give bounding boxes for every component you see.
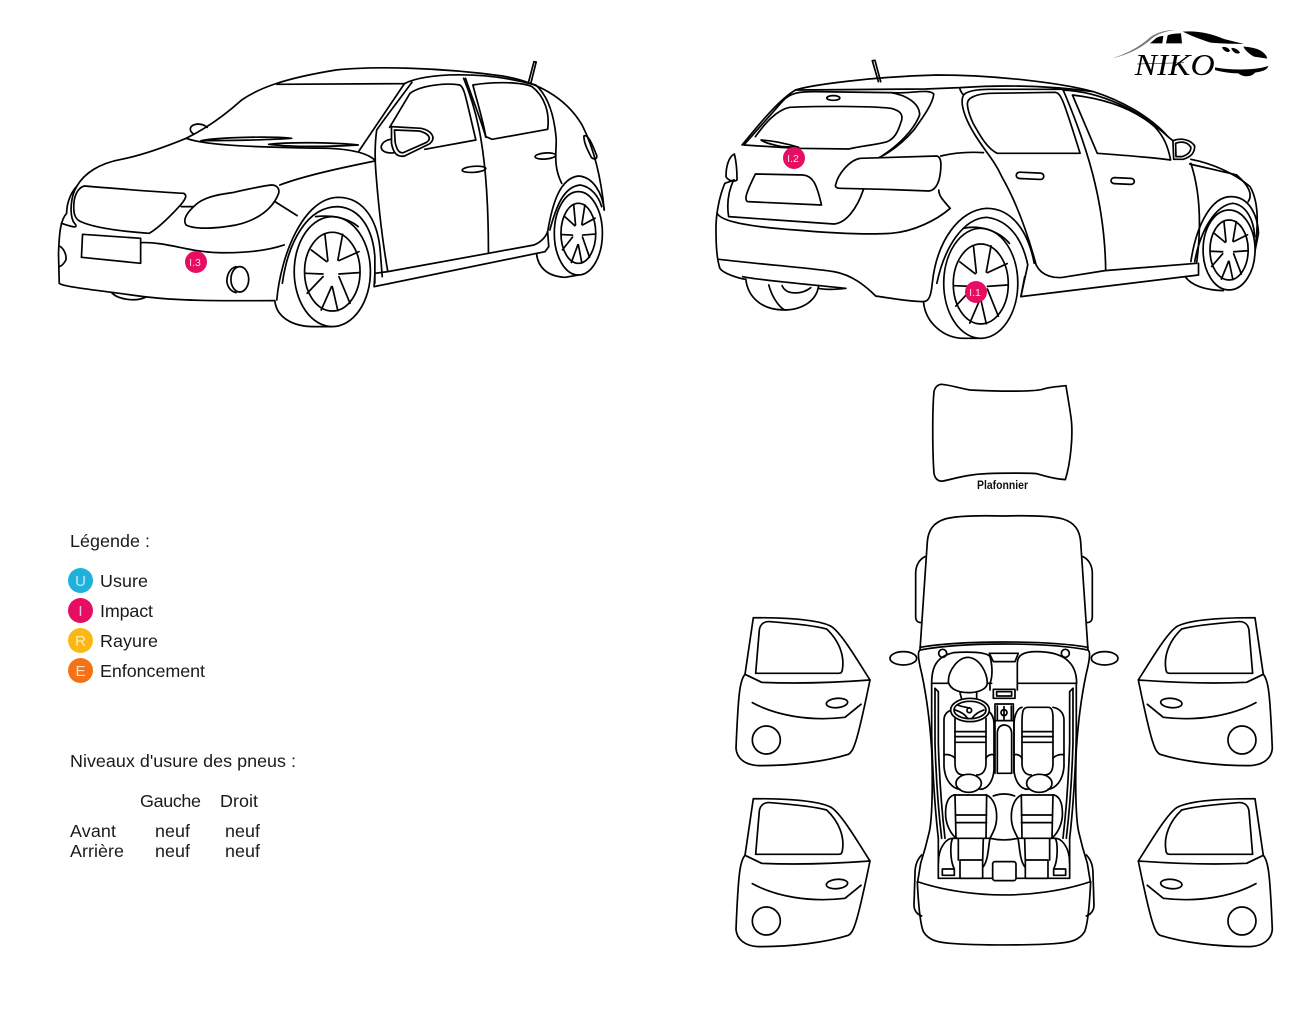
damage marker I.1 — [965, 281, 987, 303]
door handles — [1016, 172, 1044, 180]
grille — [74, 186, 186, 233]
rear light — [584, 136, 597, 159]
legend — [68, 531, 205, 683]
fog light — [231, 267, 249, 292]
roof — [742, 75, 1173, 145]
ceiling panel: plafonnier — [933, 384, 1072, 481]
logo car windows — [1150, 33, 1182, 43]
logo car underside — [1215, 66, 1268, 76]
table header — [140, 791, 258, 811]
door: front left — [736, 618, 870, 766]
doors — [464, 78, 488, 253]
legend item: impact: I — [78, 603, 83, 620]
sill — [1021, 263, 1199, 297]
antenna — [872, 60, 881, 82]
legend item: usure: Usure — [100, 571, 148, 591]
legend item: impact — [68, 598, 153, 623]
legend item: enfoncement: E — [75, 663, 86, 680]
logo: Niko car — [1112, 30, 1268, 82]
row: arriere — [70, 841, 260, 861]
row: arriere: neuf — [225, 841, 260, 861]
rear window — [744, 106, 902, 149]
bumper — [141, 243, 284, 253]
damage marker I.2 — [783, 147, 805, 169]
car: front three-quarter view — [58, 62, 604, 327]
ceiling panel label: Plafonnier — [977, 480, 1028, 492]
left front seat — [944, 710, 994, 792]
logo wordmark: NIKO — [1134, 48, 1215, 82]
left half exterior — [890, 557, 947, 916]
damage marker I.1: I.1 — [969, 287, 981, 299]
front wheel — [1191, 197, 1258, 262]
steering wheel — [951, 698, 989, 722]
driver dome — [948, 657, 987, 693]
logo car headlights — [1222, 47, 1240, 54]
right front seat — [1014, 707, 1064, 792]
tyre wear heading: Niveaux d'usure des pneus : — [70, 751, 296, 771]
door: rear right — [1138, 799, 1272, 947]
logo swoosh — [1112, 30, 1175, 58]
hood top — [920, 516, 1088, 650]
doors — [960, 88, 1197, 278]
logo car roof — [1183, 31, 1244, 44]
left rear seat — [938, 795, 997, 878]
trunk lower — [728, 180, 863, 224]
door handles — [462, 165, 486, 173]
door mirror — [1173, 139, 1195, 159]
far rear wheel — [746, 279, 818, 310]
centre console — [989, 653, 1018, 662]
plate recess — [746, 174, 821, 205]
tyre wear table — [70, 751, 296, 861]
hood — [58, 138, 275, 301]
damage marker I.3 — [185, 251, 207, 273]
logo car grille — [1243, 47, 1267, 59]
right half exterior — [1061, 557, 1118, 916]
rear floor — [938, 794, 1070, 878]
sill — [388, 232, 548, 272]
legend heading: Légende : — [70, 531, 150, 551]
hood and front wing — [1191, 159, 1257, 257]
right lamp — [835, 156, 941, 191]
table header: Gauche — [140, 791, 201, 811]
roof and windshield — [186, 68, 604, 210]
legend item: rayure — [68, 628, 158, 653]
front wheel — [275, 302, 332, 327]
antenna — [528, 62, 536, 83]
far mirror — [190, 124, 207, 134]
dashboard — [932, 652, 992, 690]
bumper — [716, 180, 746, 279]
row: avant: neuf — [155, 821, 190, 841]
row: avant: Avant — [70, 821, 116, 841]
damage marker I.3: I.3 — [189, 257, 201, 269]
legend item: rayure: Rayure — [100, 631, 158, 651]
logo strike line — [1137, 63, 1184, 64]
legend item: enfoncement — [68, 658, 205, 683]
legend item: enfoncement: Enfoncement — [100, 661, 205, 681]
row: avant: neuf — [225, 821, 260, 841]
left lamp — [726, 154, 737, 181]
row: arriere: Arrière — [70, 841, 124, 861]
car interior top view — [890, 516, 1118, 945]
row: avant — [70, 821, 260, 841]
right rear seat — [1011, 795, 1070, 878]
number plate — [81, 234, 141, 263]
door: front right — [1138, 618, 1272, 766]
rear wheel — [537, 253, 578, 277]
car: rear three-quarter view — [716, 60, 1258, 338]
main rear wheel — [923, 302, 983, 338]
legend item: impact: Impact — [100, 601, 153, 621]
door: rear left — [736, 799, 870, 947]
wiper — [761, 140, 799, 147]
rear bumper — [917, 882, 1091, 945]
row: arriere: neuf — [155, 841, 190, 861]
wipers — [201, 137, 292, 141]
legend item: usure — [68, 568, 148, 593]
table header: Droit — [220, 791, 258, 811]
hatch — [744, 91, 934, 157]
door mirror — [392, 127, 433, 156]
damage marker I.2: I.2 — [787, 153, 799, 165]
headlight — [185, 185, 279, 228]
legend item: rayure: R — [75, 633, 86, 650]
legend item: usure: U — [75, 573, 86, 590]
